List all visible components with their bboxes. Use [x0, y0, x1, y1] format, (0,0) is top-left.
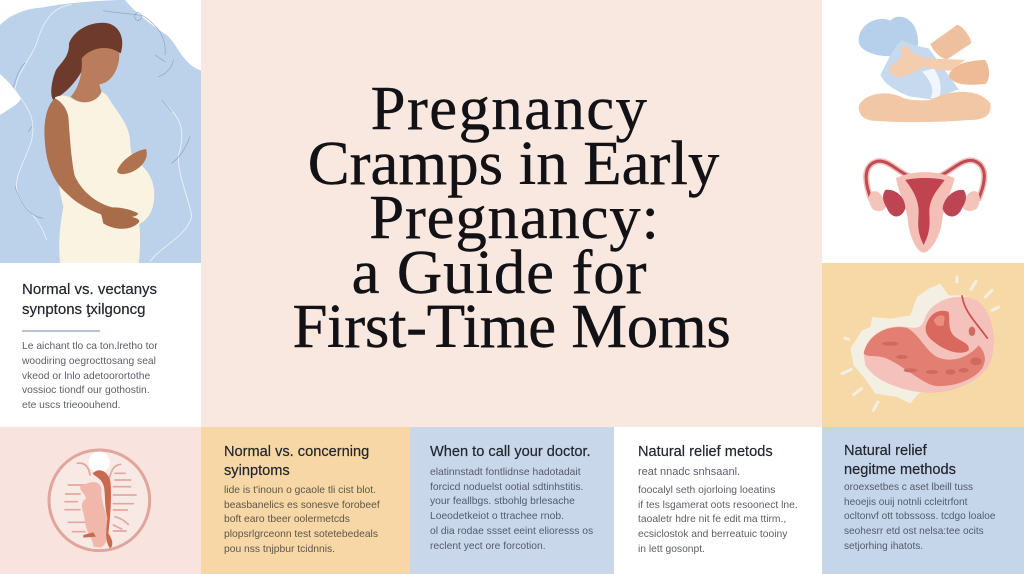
body text: elatinnstadt fontlidnse hadotadait	[430, 467, 581, 478]
body text	[844, 482, 996, 552]
heading	[844, 443, 956, 478]
body text	[224, 485, 380, 555]
panel: natural relief negative methods	[822, 427, 1024, 574]
body text: plopsrlgrceonn test sotetebedeals	[224, 529, 378, 540]
heading: syinptoms	[224, 463, 290, 479]
body text: ecsiclostok and berreatuic tooiny	[638, 529, 787, 540]
panel: natural relief methods	[614, 427, 822, 574]
heading	[22, 281, 157, 318]
body text: taoaletr hdre nit fe edit ma ttirm.,	[638, 514, 786, 525]
title: Cramps in Early	[308, 128, 719, 198]
heading: negitme methods	[844, 462, 956, 478]
heading	[224, 444, 369, 479]
subheading: reat nnadc snhsaanl.	[638, 466, 740, 478]
panel: yellow cramp illustration	[822, 263, 1024, 427]
illustration: inflamed uterus	[840, 276, 1000, 412]
body text: boft earo tbeer oolermetcds	[224, 514, 350, 525]
body text: ocltonvf ott tobssoss. tcdgo loaloe	[844, 511, 996, 522]
illustration: pillow and crossed legs	[858, 16, 991, 122]
heading: Normal vs. concerning	[224, 444, 369, 460]
panel: when to call your doctor	[410, 427, 614, 574]
body text: setjorhing ihatots.	[844, 541, 923, 552]
panel: title background	[201, 0, 822, 427]
body text: vkeod or lnlo adetoorortothe	[22, 371, 150, 382]
body text: ol dia rodae ssset eeint elioresss os	[430, 526, 593, 537]
illustration: pregnant woman	[0, 0, 201, 263]
face and neck	[71, 48, 119, 102]
title	[292, 73, 731, 361]
body text: woodiring oegrocttosang seal	[22, 356, 156, 367]
lower hand	[100, 207, 139, 229]
title: Pregnancy	[371, 73, 648, 143]
body text: your feallbgs. stbohlg brlesache	[430, 496, 575, 507]
icon: circular anatomy	[48, 448, 152, 552]
body text: reclent yect ore forcotion.	[430, 541, 546, 552]
title: First-Time Moms	[292, 291, 731, 361]
heading: When to call your doctor.	[430, 444, 591, 460]
title: a Guide for	[352, 237, 647, 307]
body text: vossioc tiondf our gothostin.	[22, 385, 150, 396]
panel: white text box	[0, 263, 201, 427]
body text: seohesrr etd ost nelsa:tee ocits	[844, 526, 984, 537]
upper hand	[117, 149, 147, 174]
body text: pou nss tnjpbur tcidnnis.	[224, 544, 335, 555]
ponytail and hair	[51, 23, 122, 100]
heading: Natural relief	[844, 443, 927, 459]
body text: Loeodetkeiot o ttrachee rnob.	[430, 511, 564, 522]
body text: heoejis ouij notnli ccleitrfont	[844, 497, 967, 508]
body text: forcicd noduelst ootial sdtinhstitis.	[430, 482, 583, 493]
title: Pregnancy:	[369, 182, 660, 252]
heading: synptons ţxilgoncg	[22, 301, 145, 318]
heading: Normal vs. vectanys	[22, 281, 157, 298]
panel: normal vs concerning symptoms	[201, 427, 410, 574]
body text	[430, 467, 593, 552]
heading: Natural relief metods	[638, 444, 773, 460]
body text: Le aichant tlo ca ton.lretho tor	[22, 341, 158, 352]
body text: ete uscs trieoouhend.	[22, 400, 120, 411]
illustration: uterus	[863, 157, 988, 253]
body text: if tes lsgamerat oots resoonect lne.	[638, 500, 798, 511]
body text	[638, 485, 798, 555]
body text	[22, 341, 158, 411]
body text: beasbanelics es sonesve forobeef	[224, 500, 380, 511]
divider	[22, 330, 100, 332]
dress	[54, 92, 154, 263]
body text: oroexsetbes c aset lbeill tuss	[844, 482, 973, 493]
panel: pink uterus icon	[0, 427, 201, 574]
body text: in lett gosonpt.	[638, 544, 705, 555]
body text: lide is t'inoun o gcaole tli cist blot.	[224, 485, 376, 496]
body text: foocalyl seth ojorloing loeatins	[638, 485, 775, 496]
arm	[44, 98, 115, 217]
